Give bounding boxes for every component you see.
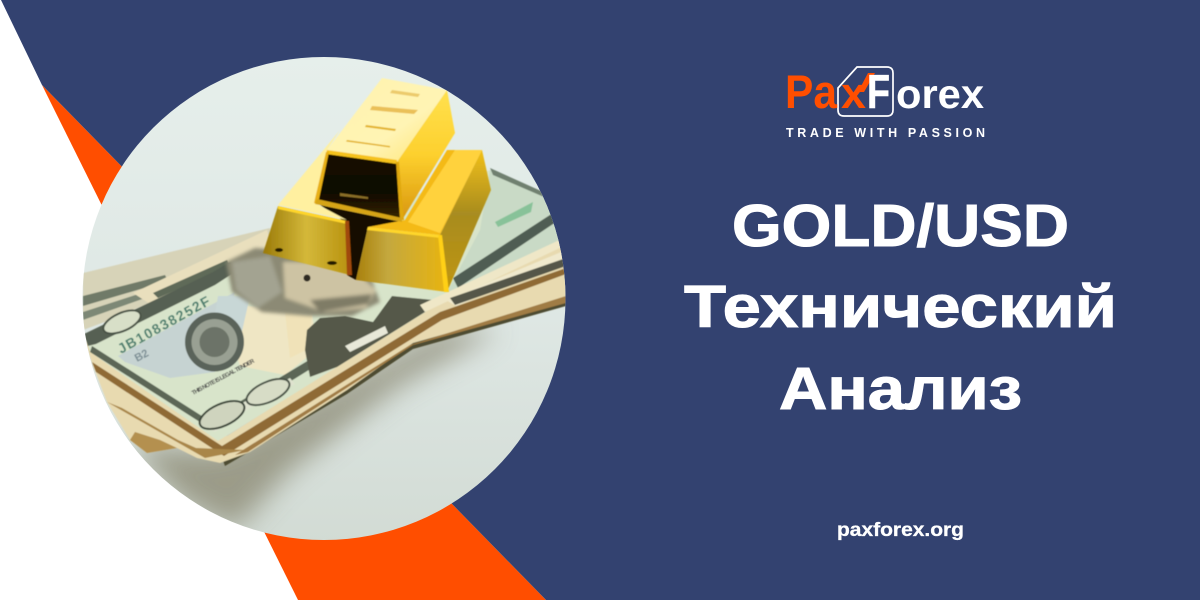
table shadow under banknotes xyxy=(130,330,500,530)
logo letter: F: F xyxy=(867,65,890,118)
table surface xyxy=(80,55,570,545)
title xyxy=(684,193,1117,422)
banknote cream centre xyxy=(232,305,314,375)
logo tagline: TRADE WITH PASSION xyxy=(786,126,985,140)
logo slash xyxy=(858,73,875,92)
logo frame xyxy=(838,67,893,116)
title line 2: Технический xyxy=(684,274,1117,340)
circular photo: gold bars on dollar bills xyxy=(80,55,570,545)
title line 1: GOLD/USD xyxy=(732,193,1069,259)
gold bars xyxy=(263,78,491,292)
note legend: THIS NOTE IS LEGAL TENDER xyxy=(191,358,256,397)
website url: paxforex.org xyxy=(837,520,964,541)
right banknote area xyxy=(449,170,558,291)
portrait: suit xyxy=(305,296,433,377)
portrait: hair and face xyxy=(226,248,380,316)
top gold bar xyxy=(314,78,455,222)
banknote stack edges xyxy=(83,236,566,463)
logo word: Pa: Pa xyxy=(785,65,838,118)
note value: B2 xyxy=(133,347,151,365)
right gold bar xyxy=(356,150,491,292)
bottom border pattern xyxy=(90,346,312,424)
title line 3: Анализ xyxy=(779,356,1022,422)
stack of banknotes xyxy=(83,168,566,466)
dark gap between bars xyxy=(320,205,402,280)
banknote pale blue patch xyxy=(118,292,235,378)
dark contact shadow xyxy=(222,298,566,466)
logo letter: x: x xyxy=(841,69,867,118)
serial number: JB10838252F xyxy=(115,292,213,357)
main banknote xyxy=(89,170,490,441)
banknote top border pattern xyxy=(84,262,238,346)
treasury seal xyxy=(185,312,244,372)
back banknote xyxy=(83,228,270,330)
left gold bar xyxy=(263,130,352,275)
orange accent shape xyxy=(42,85,546,600)
portrait: eyes xyxy=(304,274,310,282)
banknote cream band xyxy=(133,230,272,304)
logo: PaxForex xyxy=(785,65,985,140)
logo word: orex: orex xyxy=(896,71,984,117)
